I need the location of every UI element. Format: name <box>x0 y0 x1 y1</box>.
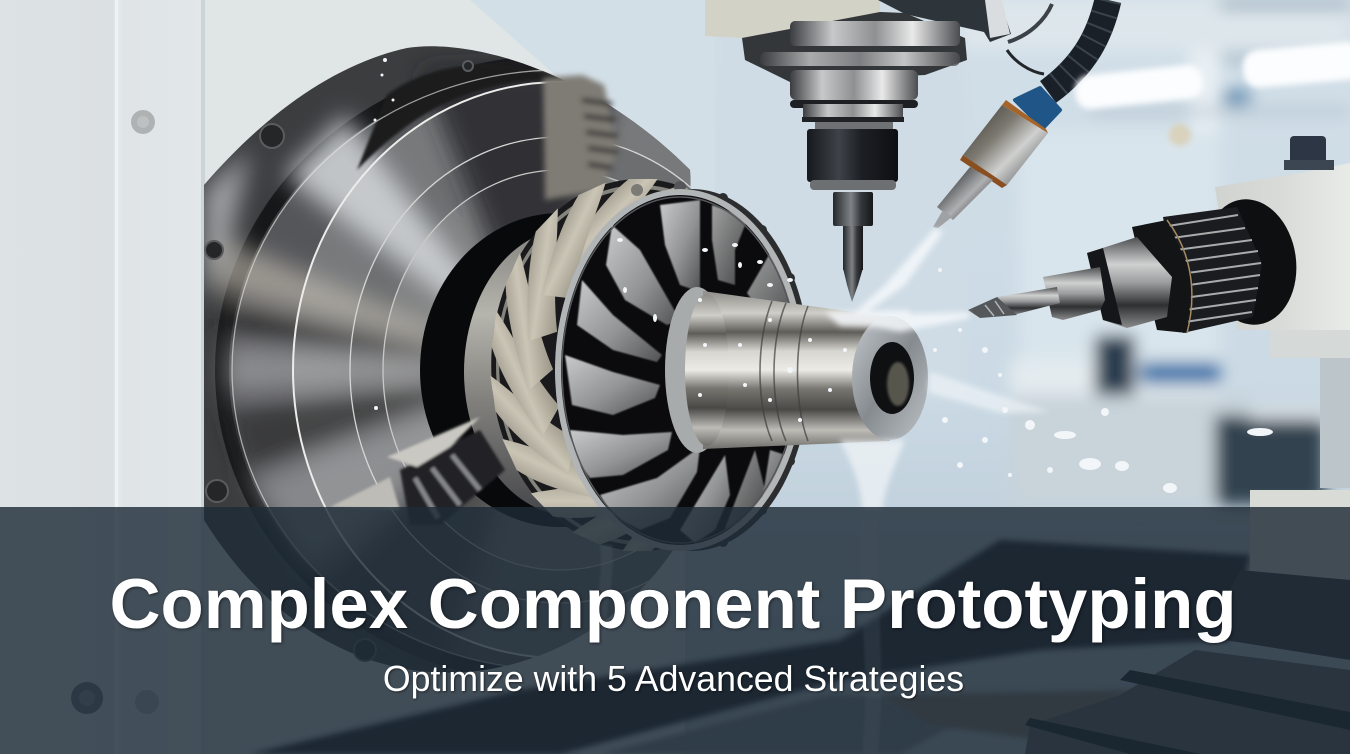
chuck jaw: top blurred <box>543 75 618 200</box>
title: Complex Component Prototyping <box>109 564 1237 643</box>
spindle: vertical milling head <box>705 0 1011 302</box>
chuck jaw: bottom blurred <box>330 417 505 525</box>
chuck bolts <box>205 61 473 661</box>
water droplets <box>374 58 1273 493</box>
ribbed collet <box>1132 207 1262 333</box>
icon: wall screw <box>131 110 155 134</box>
impeller: rear helical blades <box>474 159 806 571</box>
subtitle: Optimize with 5 Advanced Strategies <box>383 659 964 699</box>
chuck centre recess <box>420 213 700 527</box>
shaft end face with bore <box>852 316 928 440</box>
dark crescent gap and ring lines <box>357 65 565 170</box>
overlay band <box>0 507 1350 754</box>
impeller teeth along the rim <box>574 181 810 551</box>
coolant nozzle and hose <box>933 0 1108 228</box>
impeller: machined shaft <box>665 287 928 453</box>
radial sheen on the disc <box>204 60 620 680</box>
machine bed <box>250 490 1350 754</box>
impeller: front swirl blades with ring <box>558 192 803 548</box>
tool head: white housing with drill <box>968 136 1350 488</box>
coolant water spray <box>374 41 1350 754</box>
background lights <box>1074 41 1350 146</box>
chuck: large rotating metal disc <box>204 46 691 673</box>
icon: lower wall screws <box>71 682 159 714</box>
